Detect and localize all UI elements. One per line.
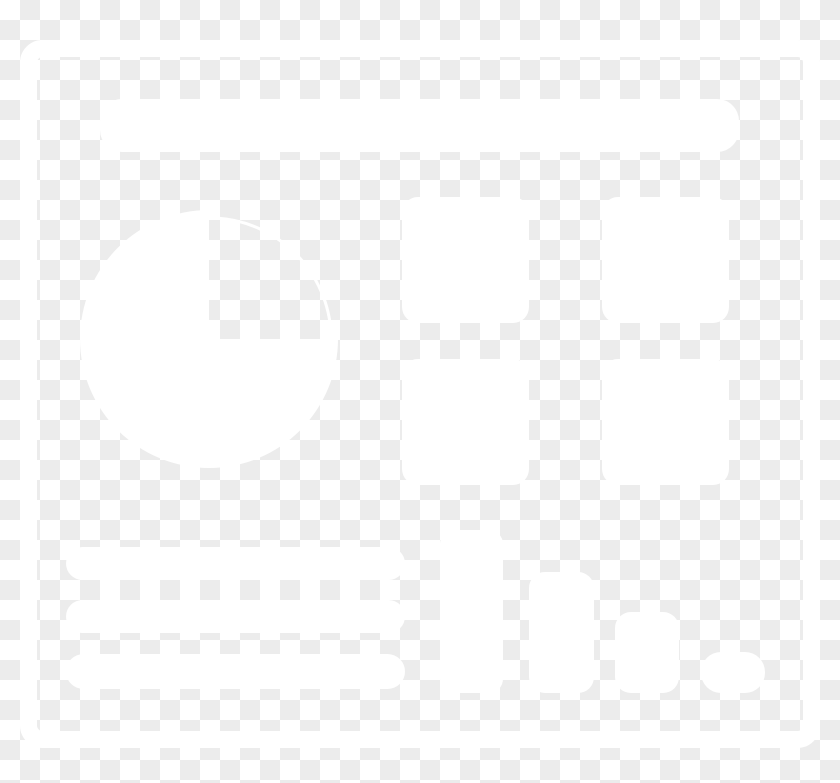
tile grid xyxy=(402,197,729,485)
title bar xyxy=(100,99,739,152)
pie chart xyxy=(80,210,338,468)
bar chart xyxy=(440,530,765,693)
text lines xyxy=(66,547,405,689)
